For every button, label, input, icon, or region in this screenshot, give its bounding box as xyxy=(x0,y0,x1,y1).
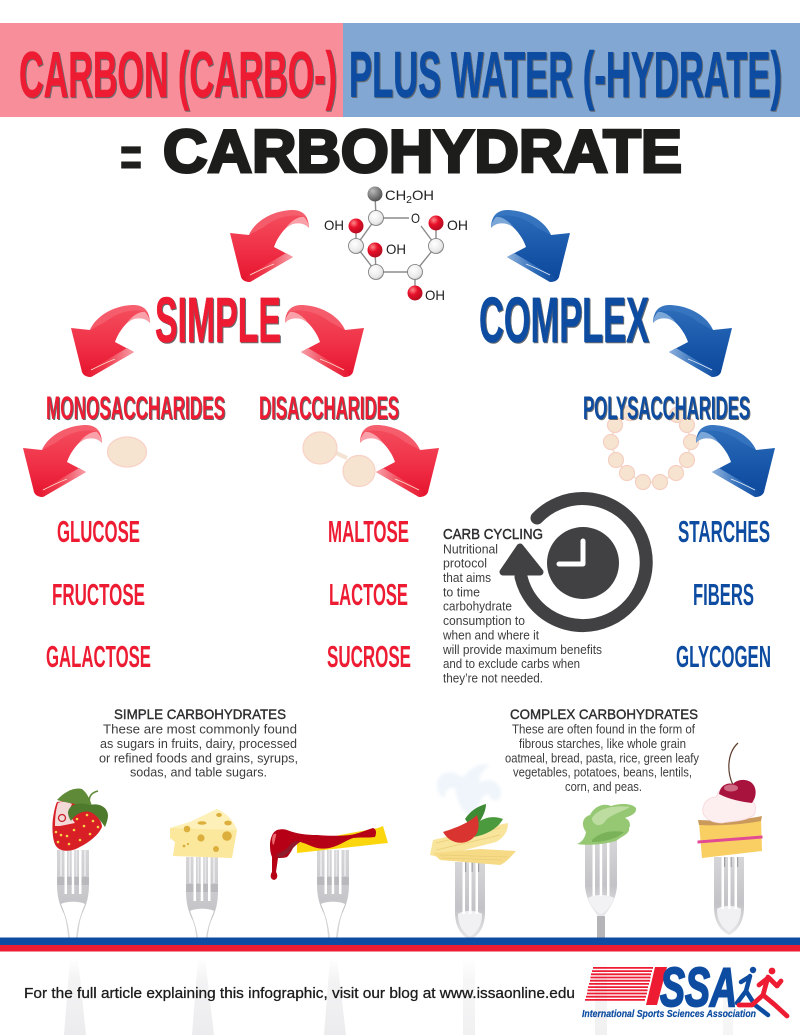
icon: disaccharide molecule xyxy=(303,432,375,486)
fork: lettuce xyxy=(585,840,617,940)
molecule diagram: OH xyxy=(386,241,406,257)
text: complex carbohydrates: vegetables, potatoes, beans, lentils, xyxy=(513,764,692,780)
text: complex carbohydrates: COMPLEX CARBOHYDRATES xyxy=(510,706,698,722)
text: complex carbohydrates: These are often found in the form of xyxy=(512,722,695,736)
molecule diagram: OH xyxy=(425,287,445,303)
food: steam xyxy=(437,764,501,815)
icon: clock with cycle arrow xyxy=(503,499,646,626)
text: carb cycling: CARB CYCLING xyxy=(443,526,543,543)
arrow: disaccharide foods xyxy=(360,425,439,497)
text: complex carbohydrates: fibrous starches, like whole grain xyxy=(519,736,686,751)
text: carb cycling: Nutritional xyxy=(443,541,498,556)
text: carb cycling: protocol xyxy=(443,556,487,571)
fork: cake xyxy=(714,857,744,935)
list: monosaccharides: GLUCOSE xyxy=(57,514,140,549)
molecule diagram: 2 xyxy=(406,195,412,206)
list: disaccharides: SUCROSE xyxy=(327,639,411,674)
icon: polysaccharide bead chain xyxy=(604,406,698,490)
text: complex carbohydrates xyxy=(505,706,699,794)
molecule diagram xyxy=(324,186,468,303)
footer text: For the full article explaining this infographic, visit our blog at www.issaonline.edu xyxy=(24,985,575,1002)
food: cheese xyxy=(170,809,237,858)
fork: pasta xyxy=(455,862,485,940)
heading: monosaccharides: MONOSACCHARIDES xyxy=(46,390,225,426)
text: carb cycling: that aims xyxy=(443,570,491,585)
text: carb cycling: carbohydrate xyxy=(443,599,512,614)
ISSA logo: SSA xyxy=(660,956,737,1018)
list: monosaccharides: GALACTOSE xyxy=(46,639,151,674)
heading: carbon: CARBON (CARBO-) xyxy=(19,38,337,111)
heading: complex: COMPLEX xyxy=(479,284,649,356)
text: simple carbohydrates: or refined foods and grains, syrups, xyxy=(99,750,298,766)
title: carbohydrate: = xyxy=(120,125,142,188)
text: carb cycling: to time xyxy=(443,585,480,600)
text: carb cycling: and to exclude carbs when xyxy=(443,656,580,671)
food: strawberry xyxy=(52,788,108,851)
text: carb cycling: they’re not needed. xyxy=(443,671,543,686)
arrow: to monosaccharides xyxy=(71,305,150,377)
text: simple carbohydrates xyxy=(99,706,298,780)
text: carb cycling: will provide maximum benefits xyxy=(442,642,602,657)
arrow: polysaccharide foods xyxy=(696,425,775,497)
icon: monosaccharide molecule xyxy=(108,437,146,467)
text: carb cycling xyxy=(442,526,602,686)
text: simple carbohydrates: SIMPLE CARBOHYDRATES xyxy=(114,706,286,722)
title: carbohydrate: CARBOHYDRATE xyxy=(163,118,682,185)
arrow: to disaccharides xyxy=(285,305,364,377)
text: complex carbohydrates: oatmeal, bread, pasta, rice, green leafy xyxy=(505,750,699,766)
list: monosaccharides xyxy=(46,514,151,674)
header band: carbon xyxy=(0,23,343,117)
text: carb cycling: consumption to xyxy=(443,613,525,628)
heading: disaccharides: DISACCHARIDES xyxy=(259,390,399,426)
molecule diagram: OH xyxy=(447,217,468,233)
food: fry with ketchup xyxy=(270,826,388,880)
fork: cheese xyxy=(186,857,218,957)
food: cake with cherry xyxy=(698,743,762,858)
header band: water xyxy=(343,23,800,117)
list: disaccharides xyxy=(327,514,411,674)
list: disaccharides: LACTOSE xyxy=(329,577,408,612)
text: simple carbohydrates: sodas, and table sugars. xyxy=(130,764,267,780)
list: disaccharides: MALTOSE xyxy=(328,514,409,549)
text: simple carbohydrates: as sugars in fruits, dairy, processed xyxy=(100,736,297,751)
molecule diagram: OH xyxy=(324,217,344,233)
food: penne with tomato and basil xyxy=(430,804,516,865)
fork: strawberry xyxy=(57,850,89,950)
arrow: monosaccharide foods xyxy=(23,425,102,497)
arrow: to simple xyxy=(230,210,309,282)
fork: sauce xyxy=(317,850,349,950)
food: lettuce xyxy=(577,804,636,845)
ISSA logo xyxy=(582,956,787,1020)
text: carb cycling: when and where it xyxy=(442,627,539,642)
list: polysaccharides xyxy=(676,514,771,674)
molecule diagram: CH xyxy=(385,187,405,203)
molecule diagram: O xyxy=(411,210,420,226)
text: simple carbohydrates: These are most commonly found xyxy=(103,722,297,736)
list: monosaccharides: FRUCTOSE xyxy=(52,577,145,612)
footer stripe xyxy=(0,938,800,952)
ISSA logo: International Sports Sciences Association xyxy=(582,1008,756,1020)
arrow: to complex xyxy=(491,210,570,282)
arrow: to polysaccharides xyxy=(653,305,732,377)
molecule diagram: OH xyxy=(412,187,434,203)
text: complex carbohydrates: corn, and peas. xyxy=(565,779,642,794)
fork reflections xyxy=(0,951,800,1035)
heading: simple: SIMPLE xyxy=(155,284,281,356)
